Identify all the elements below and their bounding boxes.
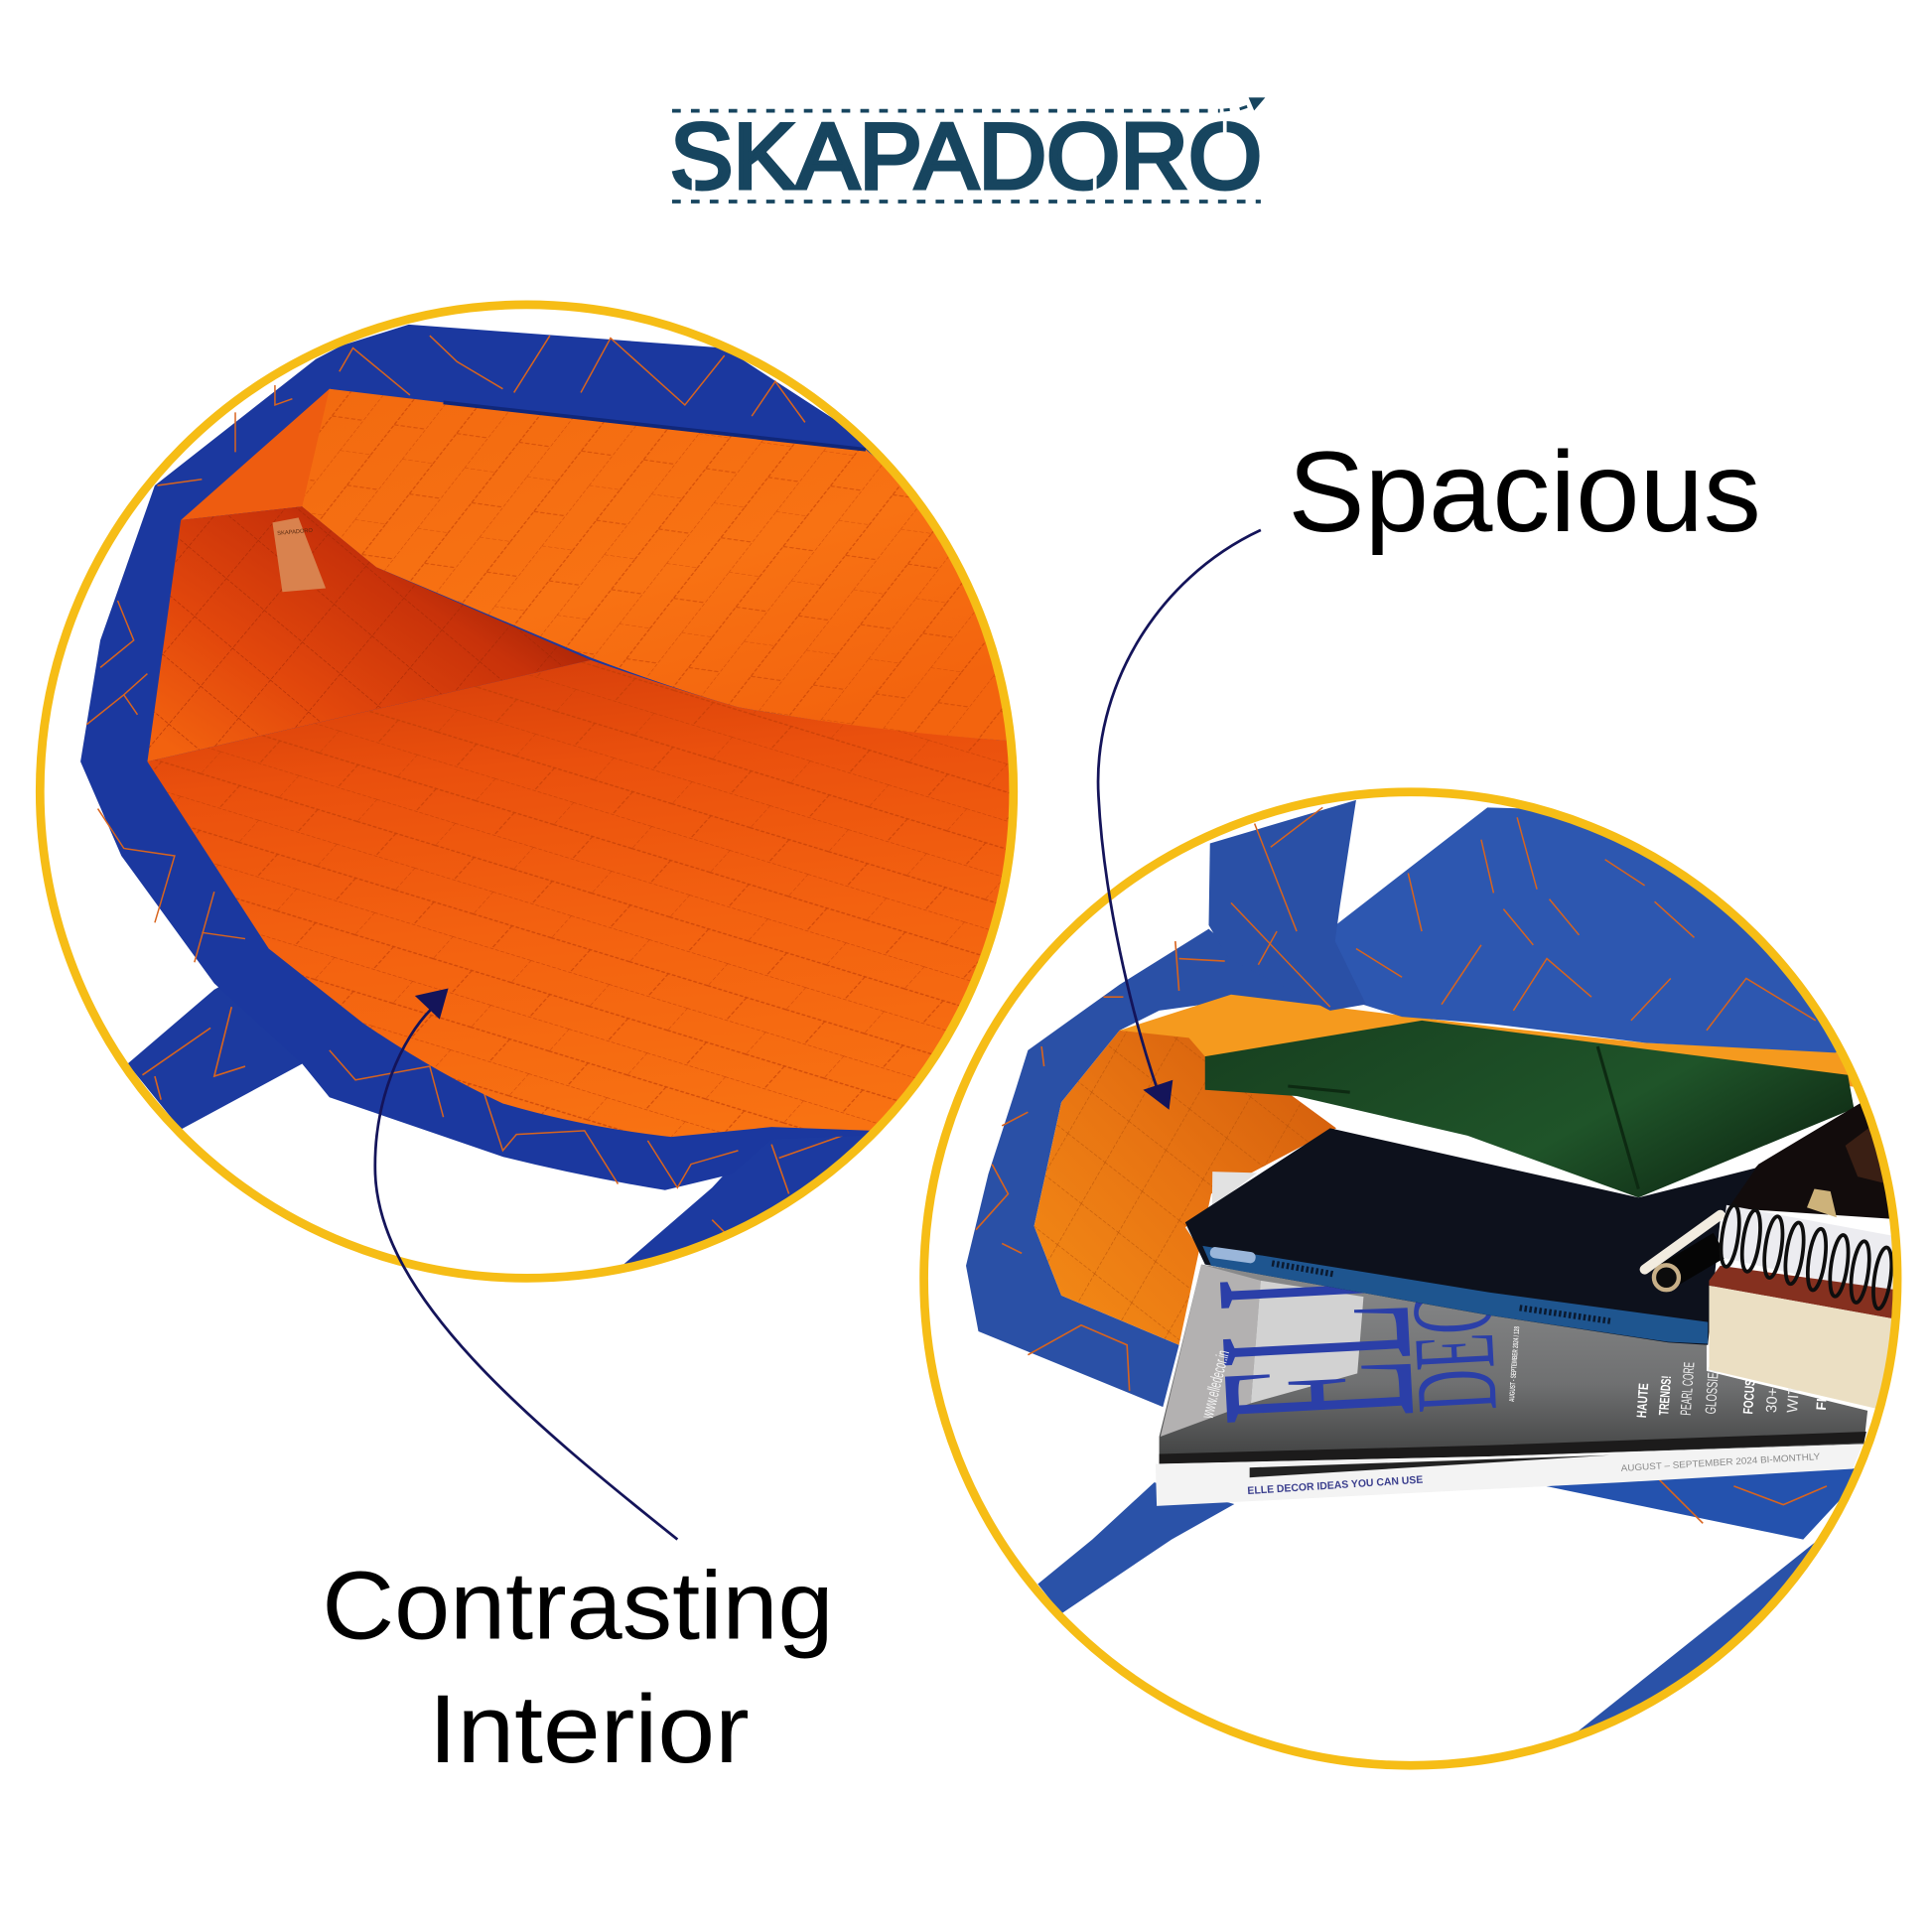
grey left band — [1161, 1265, 1261, 1437]
spiral binding — [1718, 1204, 1894, 1310]
cover line: trends: TRENDS! — [1656, 1375, 1674, 1416]
heading: Spacious: Spacious — [1288, 429, 1761, 556]
logo bottom stitched line — [672, 200, 1261, 203]
yellow ring, left circle — [40, 305, 1014, 1278]
left handle — [128, 987, 302, 1129]
url: www.elledecor.in — [1197, 1348, 1233, 1421]
magazine — [1153, 1172, 1867, 1506]
orange interior — [1035, 1031, 1336, 1345]
back bottom rim — [1546, 1467, 1870, 1540]
arrow: Contrasting Interior pointing to lining — [375, 988, 677, 1540]
gold clip — [1807, 1189, 1837, 1217]
heading: Contrasting Interior: Interior — [429, 1675, 750, 1783]
black cover edge — [1160, 1432, 1866, 1463]
tablet blue edge — [1202, 1246, 1708, 1343]
tablet button — [1209, 1246, 1256, 1264]
bright orange lining strip — [1120, 995, 1858, 1087]
logo: Skapadoro — [670, 99, 1262, 208]
cover line: 30+: 30+ — [1763, 1387, 1782, 1414]
bottom right handle — [1578, 1543, 1815, 1731]
quilted upper wall — [302, 389, 1040, 743]
rim stitching — [86, 336, 805, 1187]
pen — [1645, 1215, 1721, 1290]
white sheet — [1185, 1172, 1257, 1239]
brand tag — [272, 517, 326, 592]
circle photo: contrasting interior of the bag — [80, 325, 1040, 1288]
cover line: pearl core: PEARL CORE — [1678, 1361, 1698, 1416]
blue rim of bag — [80, 325, 1040, 1190]
heading: Contrasting Interior: Contrasting — [322, 1551, 834, 1659]
cover line: haute: HAUTE — [1634, 1383, 1651, 1419]
dark sunglasses — [1721, 1090, 1907, 1220]
cover line: with: WITH — [1784, 1374, 1804, 1414]
white bottom strip — [1156, 1445, 1863, 1506]
logo wordmark: SKAPADORO — [670, 104, 1262, 208]
right handle — [623, 1136, 866, 1265]
strip shadow — [1250, 1455, 1610, 1477]
logo top stitched line — [672, 109, 1220, 112]
strip text right: AUGUST – SEPTEMBER 2024 BI-MONTHLY — [1620, 1451, 1821, 1473]
inner wall, darker red-orange — [147, 506, 591, 761]
top flap of bag — [1327, 807, 1870, 1052]
bottom left handle — [1037, 1482, 1234, 1613]
logo stencil cuts — [694, 120, 1225, 192]
cover line: fin: FIN — [1814, 1388, 1830, 1411]
yellow ring, right circle — [924, 792, 1897, 1765]
cover — [1160, 1265, 1867, 1463]
book pages — [1709, 1286, 1901, 1415]
speaker grille — [1272, 1263, 1612, 1321]
strip text left: ELLE DECOR IDEAS YOU CAN USE — [1247, 1474, 1424, 1497]
notebook pages — [1721, 1205, 1901, 1298]
tablet — [1185, 1128, 1756, 1345]
arrow: Spacious pointing to bag interior — [1098, 530, 1261, 1110]
rim inner edge — [444, 402, 866, 450]
book spine top — [1709, 1266, 1901, 1320]
date: AUGUST - SEPTEMBER 2024 / 128 — [1507, 1326, 1521, 1402]
left blue rim — [966, 929, 1330, 1407]
subhead: DECOR — [1383, 1211, 1522, 1415]
light cover area — [1251, 1281, 1363, 1403]
cover line: focus: FOCUS — [1740, 1379, 1758, 1415]
cover line: glossier: GLOSSIER — [1703, 1365, 1723, 1415]
masthead: ELL — [1153, 1241, 1475, 1429]
upright handle — [1208, 800, 1366, 1011]
circle photo: spacious bag with contents — [966, 800, 1907, 1746]
green pouch — [1205, 1021, 1854, 1197]
brand tag: SKAPADORO — [277, 528, 314, 537]
heading: Contrasting Interior — [322, 1551, 834, 1783]
quilted floor — [147, 660, 1040, 1137]
logo needle mark — [1223, 99, 1262, 110]
orange side panel — [181, 389, 377, 568]
